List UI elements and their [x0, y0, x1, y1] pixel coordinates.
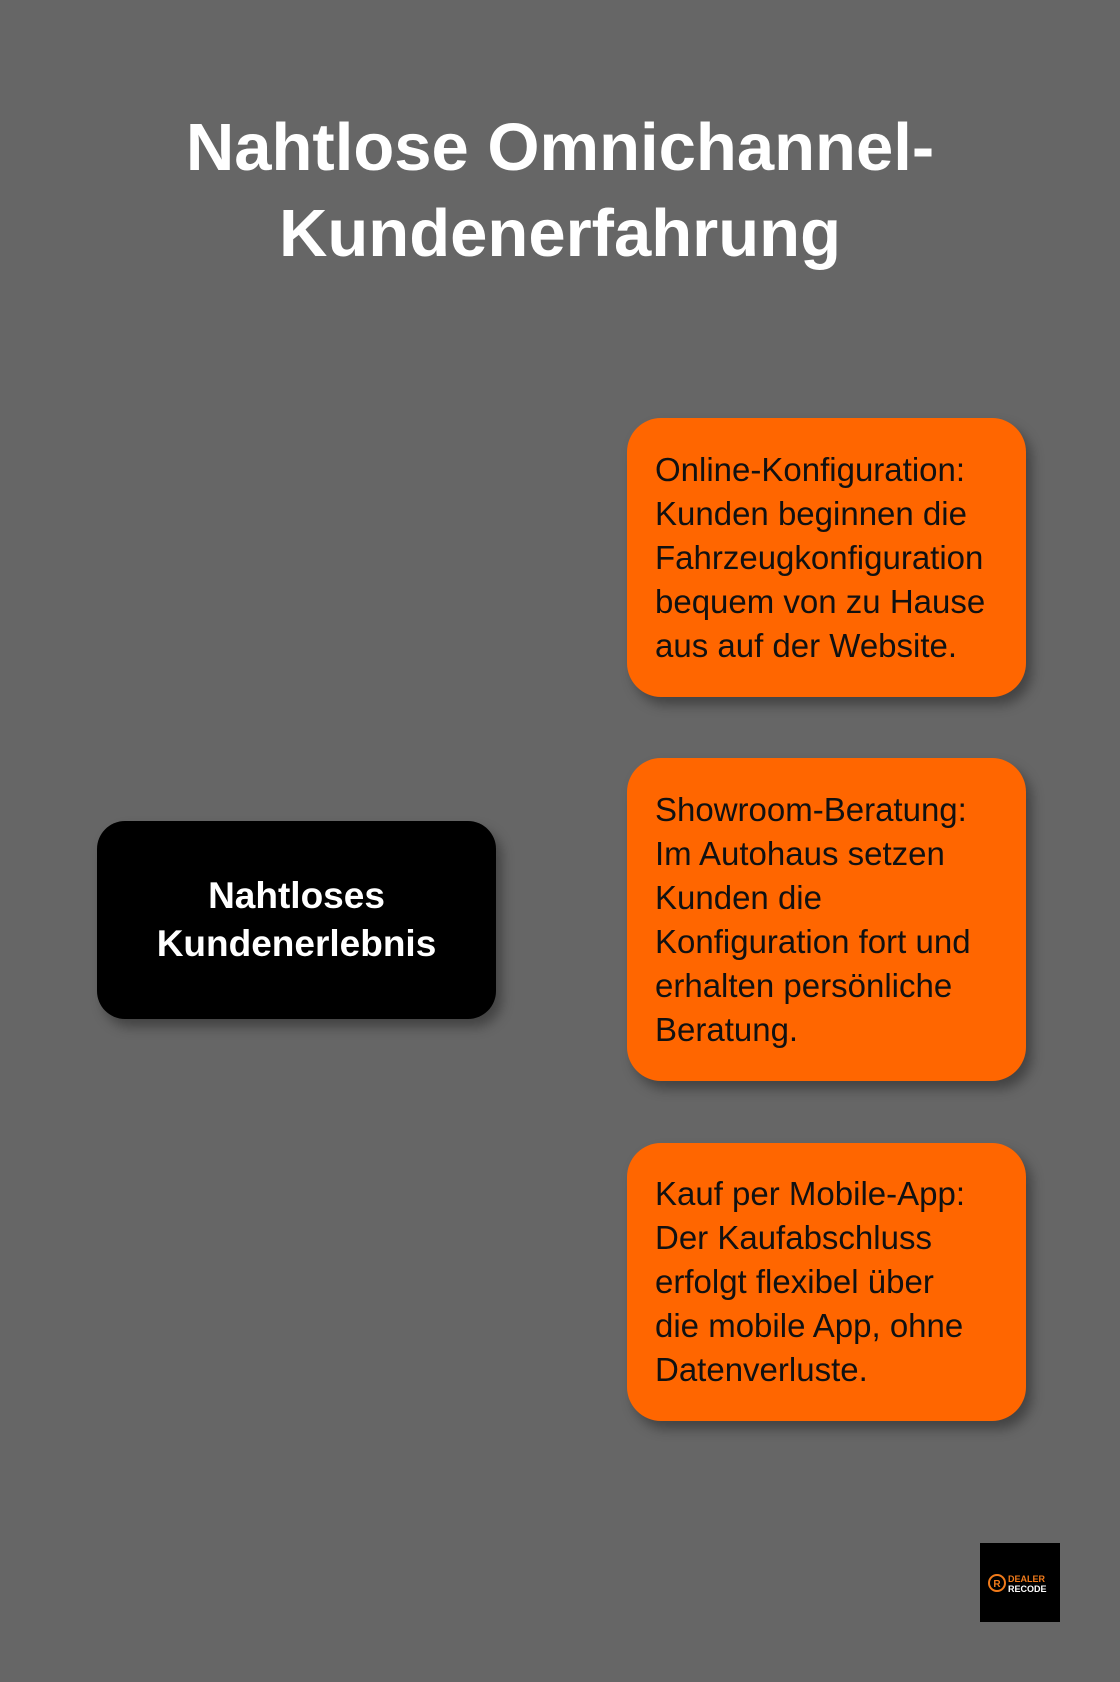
logo: Dealer Recode: RECODE: [1008, 1584, 1047, 1594]
title: [186, 110, 934, 271]
title: Kundenerfahrung: [279, 196, 841, 271]
box: Kauf per Mobile-App: [627, 1143, 1026, 1421]
central box: Nahtloses Kundenerlebnis: [97, 821, 496, 1019]
logo: Dealer Recode: R: [993, 1579, 1001, 1590]
title: Nahtlose Omnichannel-: [186, 110, 934, 185]
box: Kauf per Mobile-App: Datenverluste.: [655, 1351, 868, 1388]
box: Showroom-Beratung: Konfiguration fort und: [655, 922, 971, 960]
box: Showroom-Beratung: erhalten persönliche: [655, 966, 952, 1004]
box: Showroom-Beratung: [627, 758, 1026, 1081]
box: Showroom-Beratung: Beratung.: [655, 1010, 798, 1048]
central box: Nahtloses Kundenerlebnis: Nahtloses: [208, 875, 385, 916]
box: Online-Konfiguration: bequem von zu Hause: [655, 582, 985, 620]
central box: Nahtloses Kundenerlebnis: Kundenerlebnis: [157, 923, 436, 964]
box: Online-Konfiguration: Kunden beginnen die: [655, 494, 967, 532]
box: Kauf per Mobile-App: Der Kaufabschluss: [655, 1219, 932, 1256]
box: Showroom-Beratung: Showroom-Beratung:: [655, 790, 967, 828]
logo: Dealer Recode: [980, 1543, 1060, 1622]
logo: Dealer Recode: DEALER: [1008, 1574, 1046, 1584]
box: Showroom-Beratung: Im Autohaus setzen: [655, 834, 945, 872]
box: Online-Konfiguration: Online-Konfiguration:: [655, 450, 965, 488]
box: Showroom-Beratung: Kunden die: [655, 878, 822, 916]
box: Online-Konfiguration: Fahrzeugkonfiguration: [655, 538, 983, 576]
box: Online-Konfiguration: [627, 418, 1026, 697]
box: Kauf per Mobile-App: erfolgt flexibel über: [655, 1263, 934, 1300]
box: Kauf per Mobile-App: Kauf per Mobile-App:: [655, 1175, 965, 1212]
box: Kauf per Mobile-App: die mobile App, ohne: [655, 1307, 963, 1344]
box: Online-Konfiguration: aus auf der Website.: [655, 626, 957, 664]
